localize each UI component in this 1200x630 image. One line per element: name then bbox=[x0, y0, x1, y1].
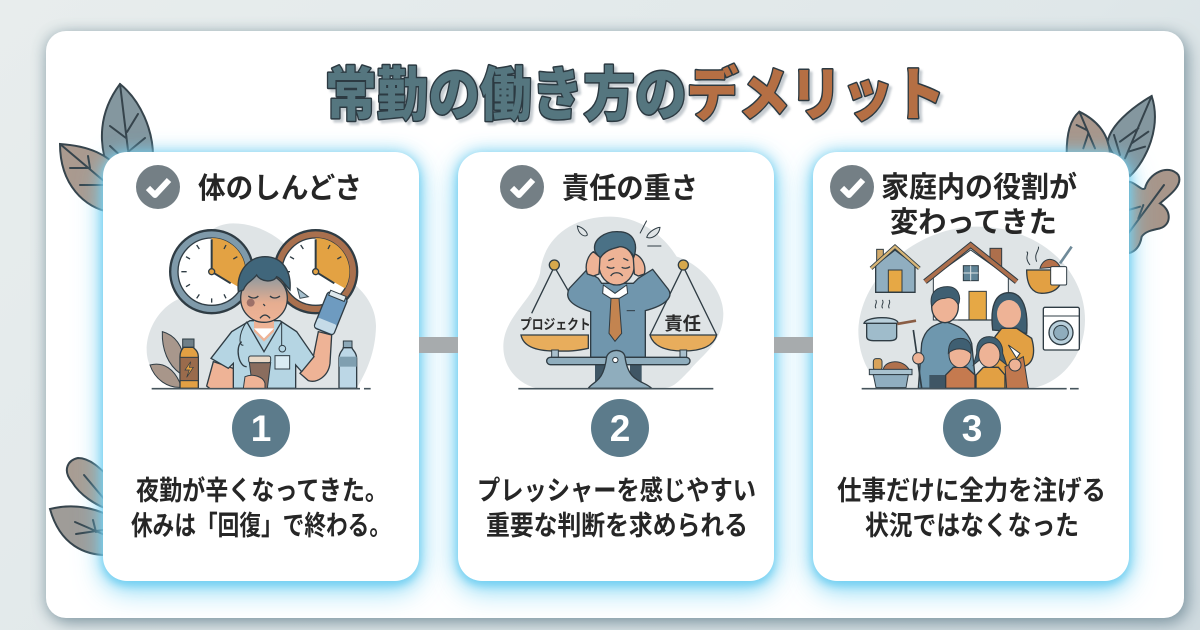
connector between cards 2 and 3 bbox=[774, 337, 813, 353]
suit bbox=[568, 269, 670, 357]
washer bbox=[1043, 307, 1079, 350]
woman bbox=[992, 293, 1027, 333]
hands on head bbox=[586, 252, 600, 276]
body text 3: 仕事だけに全力を注げる bbox=[837, 476, 1106, 506]
heading 3: 家庭内の役割が bbox=[881, 170, 1077, 204]
number 1 bbox=[232, 399, 290, 457]
held bottle bbox=[313, 289, 349, 336]
illustration: stressed worker with scales bbox=[503, 217, 723, 389]
illustration: family, house and chores bbox=[858, 227, 1085, 389]
number 2: 2 bbox=[610, 408, 630, 449]
card 2: weight of responsibility bbox=[458, 152, 774, 581]
sweat bbox=[577, 226, 660, 238]
bowl and mug bbox=[1027, 270, 1063, 293]
card 3: changing family roles bbox=[813, 152, 1129, 581]
beam bbox=[547, 357, 690, 365]
heading 2: 責任の重さ bbox=[562, 172, 698, 205]
illustration: stressed worker with scales: 責任 bbox=[664, 314, 701, 334]
man bbox=[918, 322, 975, 388]
check icon 3 bbox=[830, 165, 874, 209]
coffee cup bbox=[249, 363, 271, 388]
number 2 bbox=[591, 399, 649, 457]
head bbox=[599, 245, 634, 285]
heading 3 bbox=[881, 170, 1077, 239]
arms and torso bbox=[207, 362, 257, 389]
number 3 bbox=[943, 399, 1001, 457]
basket bbox=[883, 362, 909, 370]
leaves, energy drink, water bbox=[162, 332, 183, 373]
body text 1: 夜勤が辛くなってきた。 bbox=[136, 475, 388, 506]
body text 3 bbox=[837, 476, 1106, 541]
card 1: body fatigue bbox=[103, 152, 419, 581]
small house bbox=[877, 249, 883, 261]
illustration: tired nurse with clocks bbox=[147, 223, 376, 389]
heading 3: 変わってきた bbox=[890, 206, 1057, 239]
title: 常勤の働き方のデメリット bbox=[325, 63, 945, 128]
check icon 2 bbox=[500, 165, 544, 209]
body text 1 bbox=[131, 475, 391, 541]
heading 1: 体のしんどさ bbox=[198, 172, 362, 205]
number 1: 1 bbox=[251, 408, 271, 449]
body text 2: プレッシャーを感じやすい bbox=[477, 476, 756, 506]
pot bbox=[867, 323, 897, 341]
connector between cards 1 and 2 bbox=[419, 337, 458, 353]
illustration: stressed worker with scales: プロジェクト bbox=[520, 316, 591, 332]
body text 3: 状況ではなくなった bbox=[865, 511, 1079, 541]
body text 2: 重要な判断を求められる bbox=[486, 511, 748, 541]
body text 1: 休みは「回復」で終わる。 bbox=[131, 511, 391, 541]
legs bbox=[595, 362, 607, 388]
children bbox=[946, 367, 975, 388]
large house bbox=[990, 248, 1002, 267]
check icon 1 bbox=[136, 165, 180, 209]
number 3: 3 bbox=[962, 408, 982, 449]
body text 2 bbox=[477, 476, 756, 541]
